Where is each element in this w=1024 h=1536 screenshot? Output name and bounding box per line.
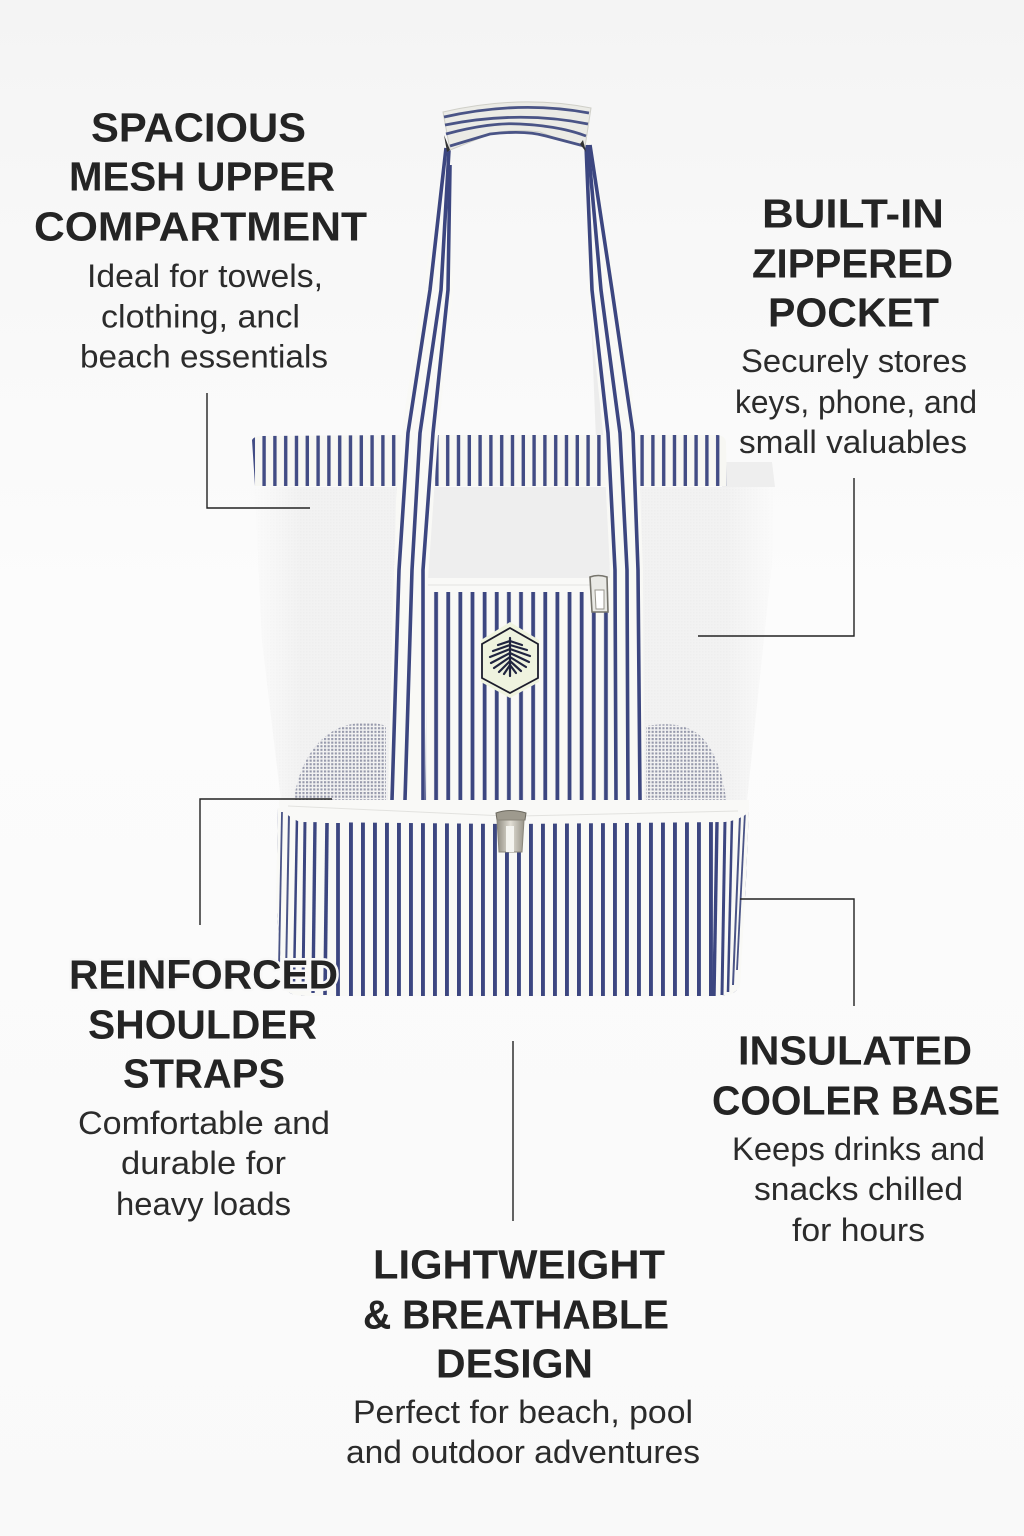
callout: lightweight and breathable design: [346, 1041, 700, 1470]
heading: COMPARTMENT: [34, 204, 367, 250]
pocket zipper band: [425, 578, 606, 592]
insulated cooler base: [276, 806, 749, 996]
leader line: [698, 478, 854, 636]
left strap: [389, 145, 453, 800]
heading: [69, 952, 338, 1096]
heading: INSULATED: [738, 1028, 972, 1074]
mesh upper compartment: [255, 487, 773, 800]
cooler zipper band: [279, 800, 749, 824]
description: Ideal for towels,: [87, 258, 323, 294]
logo badge: [481, 622, 539, 698]
back strap handle: [584, 140, 604, 440]
description: keys, phone, and: [735, 384, 977, 420]
leader line: [512, 1041, 514, 1221]
mesh edge highlight: [255, 487, 773, 800]
mesh shadow right: [646, 724, 726, 800]
callout: built-in zippered pocket: [698, 190, 977, 636]
leader line: [740, 899, 854, 1006]
back panel of mesh behind the top band: [722, 462, 775, 487]
description: Perfect for beach, pool: [353, 1394, 693, 1430]
description: Keeps drinks and: [732, 1131, 985, 1167]
heading: [752, 190, 953, 336]
heading: POCKET: [768, 290, 939, 336]
description: and outdoor adventures: [346, 1434, 700, 1470]
leader line: [200, 799, 332, 925]
callout: reinforced shoulder straps: [69, 799, 338, 1222]
description: [78, 1105, 330, 1222]
leader line: [207, 393, 310, 508]
mesh shadow left: [294, 723, 386, 800]
cooler side stripes: [276, 808, 749, 996]
pocket stripes: [424, 590, 622, 800]
heading: ZIPPERED: [752, 240, 953, 286]
top handle: [443, 102, 591, 152]
heading: [712, 1028, 1000, 1124]
description: [346, 1394, 700, 1470]
description: for hours: [792, 1212, 925, 1248]
heading: [34, 104, 367, 250]
description: beach essentials: [80, 338, 328, 374]
right strap: [584, 140, 644, 800]
description: [80, 258, 328, 374]
description: [732, 1131, 985, 1248]
description: heavy loads: [116, 1186, 291, 1222]
description: [735, 343, 977, 460]
heading: REINFORCED: [69, 952, 338, 998]
heading: DESIGN: [436, 1340, 593, 1386]
pocket zipper pull: [590, 576, 608, 612]
heading: SPACIOUS: [91, 104, 306, 150]
description: Securely stores: [741, 343, 967, 379]
top striped band: [252, 435, 727, 486]
heading: COOLER BASE: [712, 1078, 1000, 1124]
description: snacks chilled: [754, 1171, 963, 1207]
heading: SHOULDER: [88, 1002, 317, 1048]
pocket panel: [388, 565, 642, 800]
description: small valuables: [739, 424, 967, 460]
heading: BUILT-IN: [762, 190, 944, 236]
heading: MESH UPPER: [69, 154, 335, 200]
description: clothing, ancl: [101, 298, 300, 334]
heading: [363, 1242, 669, 1386]
cooler zipper pull: [496, 810, 526, 852]
heading: & BREATHABLE: [363, 1292, 669, 1338]
callout: insulated cooler base: [712, 899, 1000, 1248]
mesh panel above the pocket: [427, 487, 610, 578]
description: durable for: [121, 1145, 286, 1181]
product: striped mesh tote bag: [252, 102, 775, 996]
palm leaf: [490, 638, 530, 676]
callout: spacious mesh upper compartment: [34, 104, 367, 508]
heading: LIGHTWEIGHT: [373, 1242, 665, 1288]
heading: STRAPS: [123, 1050, 285, 1096]
description: Comfortable and: [78, 1105, 330, 1141]
